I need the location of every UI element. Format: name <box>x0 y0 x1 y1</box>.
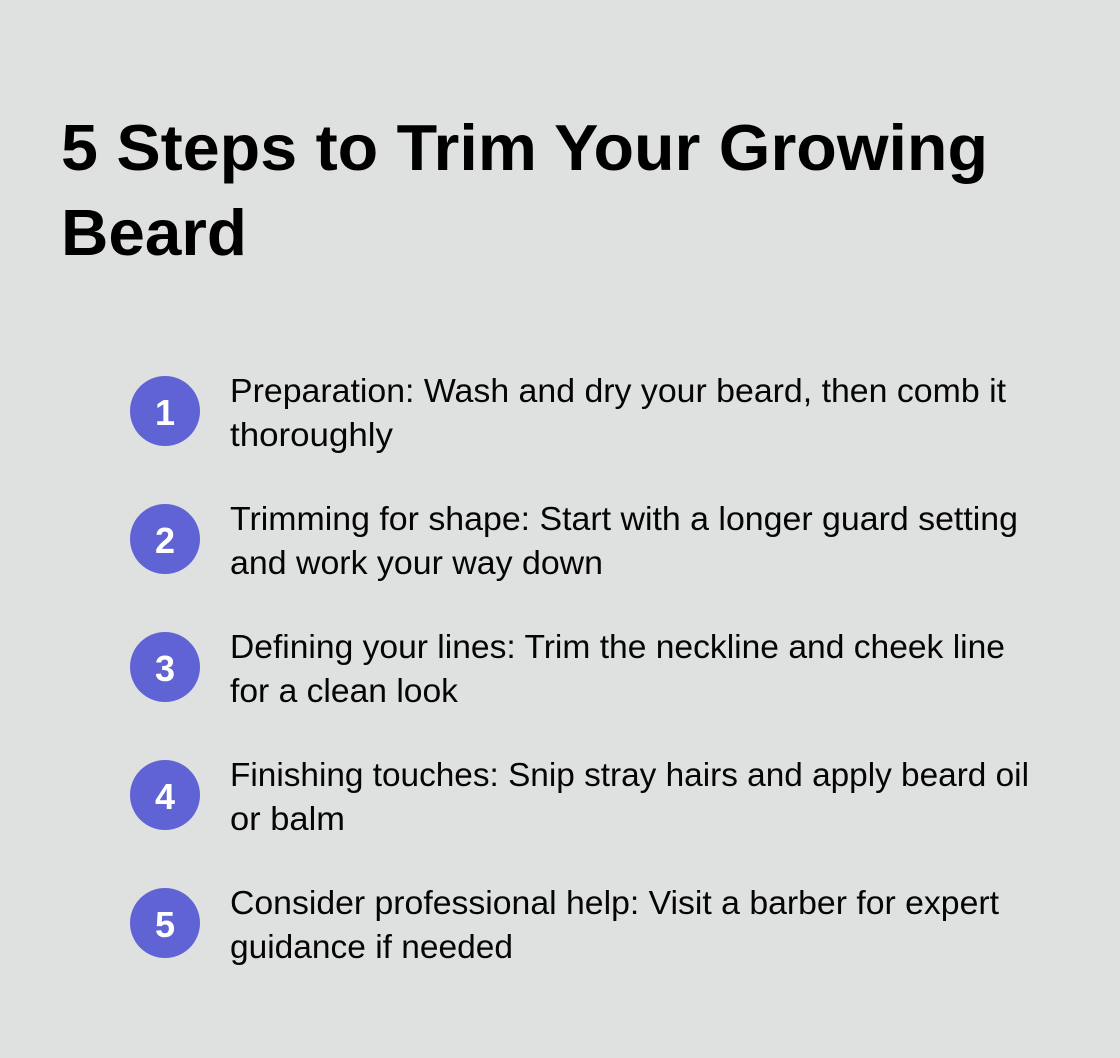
step 4 <box>130 756 1029 837</box>
step 3 <box>130 628 1005 709</box>
step 1 <box>130 372 1006 453</box>
step 5 text: Consider professional help: Visit a barber for expert <box>230 884 999 921</box>
number badge 3: 3 <box>155 648 175 689</box>
number badge 2 <box>130 504 200 574</box>
number badge 3 <box>130 632 200 702</box>
number badge 5: 5 <box>155 904 175 945</box>
title <box>61 111 988 269</box>
number badge 4: 4 <box>155 776 175 817</box>
step 2 <box>130 500 1018 581</box>
step 4 text: or balm <box>230 800 345 837</box>
step 3 text: Defining your lines: Trim the neckline and cheek line <box>230 628 1005 665</box>
step 3 text <box>230 628 1005 709</box>
step 1 text: thoroughly <box>230 416 394 453</box>
number badge 4 <box>130 760 200 830</box>
number badge 1 <box>130 376 200 446</box>
step 4 text: Finishing touches: Snip stray hairs and apply beard oil <box>230 756 1029 793</box>
number badge 5 <box>130 888 200 958</box>
number badge 2: 2 <box>155 520 175 561</box>
step 4 text <box>230 756 1029 837</box>
number badge 1: 1 <box>155 392 175 433</box>
step 1 text <box>230 372 1006 453</box>
step 2 text: and work your way down <box>230 544 603 581</box>
step 1 text: Preparation: Wash and dry your beard, then comb it <box>230 372 1006 409</box>
step 2 text <box>230 500 1018 581</box>
title: Beard <box>61 196 247 269</box>
title: 5 Steps to Trim Your Growing <box>61 111 988 184</box>
step 2 text: Trimming for shape: Start with a longer guard setting <box>230 500 1018 537</box>
step 3 text: for a clean look <box>230 672 458 709</box>
step 5 <box>130 884 999 965</box>
step 5 text: guidance if needed <box>230 928 513 965</box>
step 5 text <box>230 884 999 965</box>
